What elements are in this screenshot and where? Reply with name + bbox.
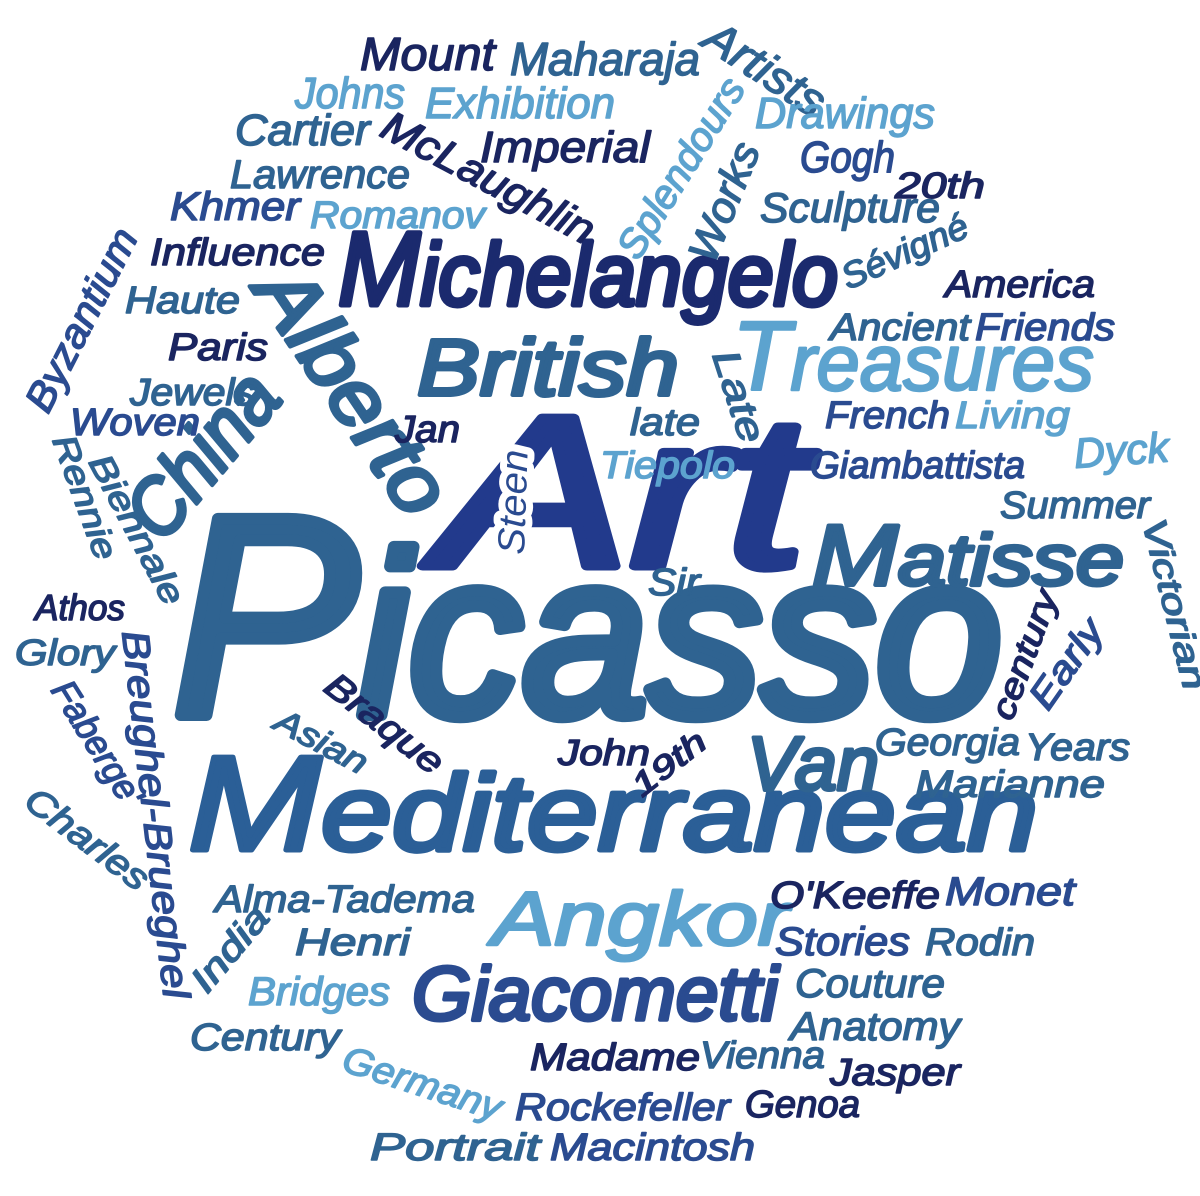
word: Marianne: Marianne	[915, 764, 1105, 806]
word: India: India	[182, 897, 277, 1000]
word: Rennie: Rennie	[44, 430, 125, 565]
word: Sévigné: Sévigné	[835, 205, 975, 297]
word: Mediterranean: Mediterranean	[188, 728, 1038, 879]
word: America: America	[943, 264, 1095, 306]
word: Lawrence: Lawrence	[230, 153, 410, 197]
word: Art: Art	[422, 371, 818, 612]
word: Imperial: Imperial	[480, 123, 651, 172]
word: Living: Living	[955, 395, 1070, 437]
word: Mount: Mount	[360, 28, 497, 80]
word: Summer: Summer	[1000, 485, 1151, 527]
word: Drawings: Drawings	[755, 89, 935, 138]
word: Asian: Asian	[266, 700, 374, 782]
word: Johns: Johns	[294, 69, 405, 118]
word: McLaughlin: McLaughlin	[374, 101, 603, 253]
word: 20th: 20th	[894, 165, 985, 206]
word: Alma-Tadema: Alma-Tadema	[213, 879, 475, 921]
word: Breughel-Brueghel: Breughel-Brueghel	[113, 628, 197, 1002]
word: Treasures: Treasures	[732, 301, 1094, 411]
word: Woven: Woven	[70, 402, 200, 444]
word: Macintosh: Macintosh	[550, 1127, 755, 1169]
word: Athos: Athos	[33, 587, 125, 628]
word: Anatomy: Anatomy	[788, 1005, 963, 1049]
word: Van: Van	[747, 722, 879, 807]
word: Madame: Madame	[530, 1037, 700, 1079]
word: Alberto: Alberto	[234, 245, 469, 532]
word: Early: Early	[1021, 609, 1114, 717]
word: Cartier: Cartier	[235, 106, 372, 155]
word: Portrait: Portrait	[370, 1127, 542, 1169]
word: Friends: Friends	[975, 307, 1115, 349]
word: Matisse: Matisse	[812, 508, 1124, 604]
word: Giambattista: Giambattista	[810, 445, 1025, 487]
word: Vienna: Vienna	[700, 1035, 825, 1077]
word: Rockefeller: Rockefeller	[515, 1087, 732, 1129]
word: Germany: Germany	[337, 1039, 509, 1130]
word: Khmer: Khmer	[170, 185, 302, 229]
word: Jewels: Jewels	[129, 372, 255, 414]
word: Charles: Charles	[17, 779, 158, 899]
word: Henri: Henri	[295, 922, 412, 964]
word: Biennale: Biennale	[81, 448, 192, 611]
word: French: French	[825, 395, 950, 437]
word: Stories: Stories	[775, 920, 910, 964]
word: Sculpture: Sculpture	[760, 184, 940, 231]
word: Genoa: Genoa	[745, 1084, 860, 1126]
word: Years: Years	[1025, 727, 1130, 769]
word: Glory: Glory	[15, 632, 117, 673]
word: Dyck: Dyck	[1072, 423, 1172, 477]
word: Ancient: Ancient	[828, 307, 972, 349]
word: Works: Works	[679, 135, 769, 268]
word: Gogh: Gogh	[800, 133, 895, 182]
word: century: century	[984, 583, 1067, 725]
word: Sir: Sir	[648, 562, 701, 604]
word: Angkor: Angkor	[487, 877, 792, 962]
word: John: John	[557, 732, 650, 773]
word: Bridges: Bridges	[248, 970, 390, 1014]
word: Steen: Steen	[491, 449, 537, 555]
word: 19th: 19th	[624, 723, 713, 804]
word: Rodin: Rodin	[925, 922, 1035, 964]
word: Giacometti: Giacometti	[412, 952, 780, 1037]
word: Braque: Braque	[317, 664, 453, 782]
word: Splendours: Splendours	[608, 70, 754, 267]
word: Paris: Paris	[168, 327, 268, 369]
word: Georgia: Georgia	[875, 722, 1020, 764]
word: Jan: Jan	[394, 409, 460, 451]
word: Romanov: Romanov	[310, 195, 487, 237]
word: Couture: Couture	[795, 962, 945, 1006]
word: Jasper: Jasper	[829, 1052, 962, 1094]
word: late: late	[630, 402, 700, 444]
word: Influence: Influence	[150, 232, 325, 274]
word: British: British	[417, 323, 679, 412]
word: O'Keeffe: O'Keeffe	[770, 875, 940, 917]
word: Exhibition: Exhibition	[425, 79, 615, 128]
word: China: China	[107, 353, 297, 556]
word: Haute: Haute	[125, 280, 240, 322]
word: Artists: Artists	[692, 8, 836, 127]
word: Tiepolo: Tiepolo	[600, 445, 735, 487]
word: Byzantium: Byzantium	[17, 221, 147, 419]
word: Michelangelo: Michelangelo	[338, 211, 838, 328]
word: Picasso: Picasso	[172, 458, 1002, 776]
word: Maharaja: Maharaja	[510, 33, 700, 85]
word: Monet: Monet	[945, 870, 1077, 914]
word: Century: Century	[190, 1017, 342, 1059]
word: Faberge': Faberge'	[43, 673, 153, 814]
word: Late: Late	[703, 345, 773, 448]
